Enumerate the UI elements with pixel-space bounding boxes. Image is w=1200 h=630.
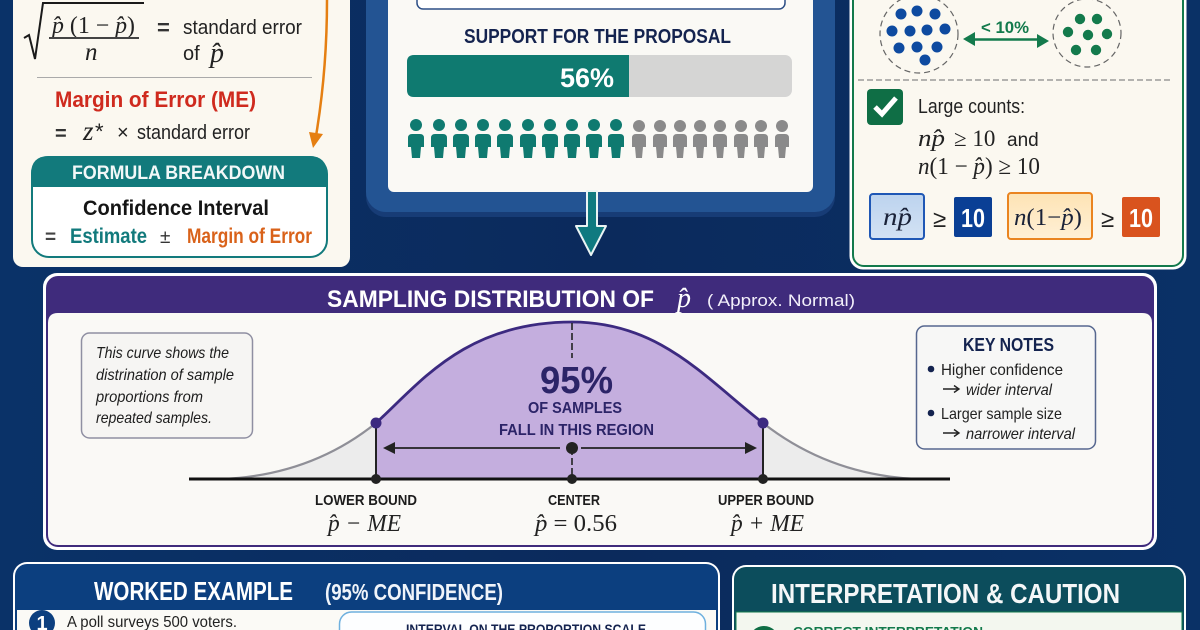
bar chart: 56 percent support: 56% (560, 63, 614, 93)
heading: support for the proposal: SUPPORT FOR THE PROPOSAL (464, 26, 731, 48)
label: center (533, 492, 617, 537)
panel: interpretation and caution (732, 565, 1186, 630)
formula: margin of error: × (117, 122, 129, 144)
heading: sampling distribution of p-hat: SAMPLING DISTRIBUTION OF (327, 286, 654, 313)
formula: square root standard error: p̂ (1 − p̂) (50, 13, 135, 39)
panel: conditions (851, 0, 1185, 268)
text: large counts condition: np̂ (918, 126, 945, 152)
formula: square root standard error: n (85, 39, 98, 66)
callout: key notes: wider interval (966, 382, 1052, 399)
text: large counts condition: and (1007, 130, 1039, 151)
callout: n p-hat at least 10 (870, 194, 992, 239)
text: large counts condition: n(1 − p̂) ≥ 10 (918, 154, 1040, 180)
label: center: CENTER (548, 492, 600, 509)
chart: normal curve with 95 percent region: OF SAMPLES (528, 400, 622, 417)
callout: n(1 - p-hat) at least 10 (1008, 193, 1160, 239)
panel: formula breakdown: Estimate (70, 225, 147, 248)
formula: square root standard error: of (183, 43, 200, 65)
text: large counts condition: Large counts: (918, 96, 1025, 118)
callout: curve explanation: distrination of sample (96, 367, 234, 384)
step 1 (29, 610, 237, 630)
formula: square root standard error: p̂ (208, 38, 224, 69)
panel: formula breakdown: = (45, 227, 56, 248)
panel: sample poll result (366, 0, 835, 217)
formula: square root standard error: = (157, 15, 170, 40)
callout: key notes: KEY NOTES (963, 335, 1054, 355)
heading: sampling distribution of p-hat: ( Approx. Normal) (707, 291, 855, 310)
callout: key notes: Larger sample size (941, 406, 1062, 423)
callout: curve explanation: repeated samples. (96, 410, 212, 427)
callout: n p-hat at least 10: ≥ (933, 206, 946, 233)
icon: green check box (867, 89, 903, 125)
heading: worked example (94, 576, 503, 606)
panel: worked example (13, 562, 720, 630)
label: upper bound: p̂ + ME (729, 511, 804, 537)
callout: key notes (916, 326, 1096, 449)
icon row: people, 10 of 18 supporting (408, 119, 789, 158)
heading: margin of error: Margin of Error (ME) (55, 87, 256, 112)
arrow: teal down arrow (576, 191, 606, 255)
formula: margin of error: z (82, 116, 94, 146)
formula: square root standard error: standard error (183, 17, 302, 39)
panel: formula breakdown: Margin of Error (187, 225, 312, 248)
arrow: orange curve to breakdown (309, 0, 327, 148)
label: upper bound (718, 492, 814, 537)
callout: curve explanation (82, 333, 252, 438)
heading: worked example: (95% CONFIDENCE) (325, 579, 503, 605)
callout: key notes: Higher confidence (941, 362, 1063, 379)
bar chart: 56 percent support (407, 55, 792, 97)
chart: normal curve with 95 percent region: FALL IN THIS REGION (499, 422, 654, 439)
text: large counts condition: ≥ 10 (954, 126, 995, 151)
callout: curve explanation: This curve shows the (96, 345, 229, 362)
panel: formula breakdown: ± (160, 227, 170, 248)
callout: key notes: narrower interval (966, 426, 1075, 443)
panel: formula breakdown (31, 156, 327, 257)
formula: margin of error: * (95, 119, 104, 144)
diagram: sample under 10 percent of population: < 10% (981, 18, 1029, 37)
heading: worked example: WORKED EXAMPLE (94, 576, 293, 606)
chart: normal curve with 95 percent region: 95% (540, 360, 613, 402)
label: upper bound: UPPER BOUND (718, 492, 814, 509)
chart: normal curve with 95 percent region (189, 322, 950, 484)
label: lower bound (315, 492, 417, 537)
panel: standard error and margin of error formulas (13, 0, 350, 267)
callout: curve explanation: proportions from (95, 389, 203, 406)
label: lower bound: LOWER BOUND (315, 492, 417, 509)
callout: n p-hat at least 10: 10 (961, 203, 985, 233)
label: lower bound: p̂ − ME (326, 511, 401, 537)
callout: n p-hat at least 10: np̂ (883, 204, 912, 231)
chart box: interval on the proportion scale (340, 612, 706, 630)
formula: margin of error (55, 116, 250, 146)
panel: formula breakdown: FORMULA BREAKDOWN (72, 163, 285, 184)
heading: sampling distribution of p-hat: p̂ (675, 283, 691, 314)
panel: sampling distribution (43, 273, 1157, 550)
text: large counts condition (918, 96, 1040, 180)
formula: margin of error: = (55, 123, 67, 145)
panel: formula breakdown: Confidence Interval (83, 197, 269, 220)
diagram: sample under 10 percent of population (880, 0, 1121, 73)
heading: sampling distribution of p-hat (327, 283, 855, 314)
heading: interpretation and caution: INTERPRETATION & CAUTION (771, 578, 1120, 609)
callout: n(1 - p-hat) at least 10: ≥ (1101, 206, 1114, 233)
callout: n(1 - p-hat) at least 10: 10 (1129, 203, 1153, 233)
formula: margin of error: standard error (137, 122, 250, 144)
callout: n(1 - p-hat) at least 10: n(1−p̂) (1014, 205, 1082, 231)
label: center: p̂ = 0.56 (533, 511, 617, 537)
formula: square root standard error (24, 3, 302, 69)
